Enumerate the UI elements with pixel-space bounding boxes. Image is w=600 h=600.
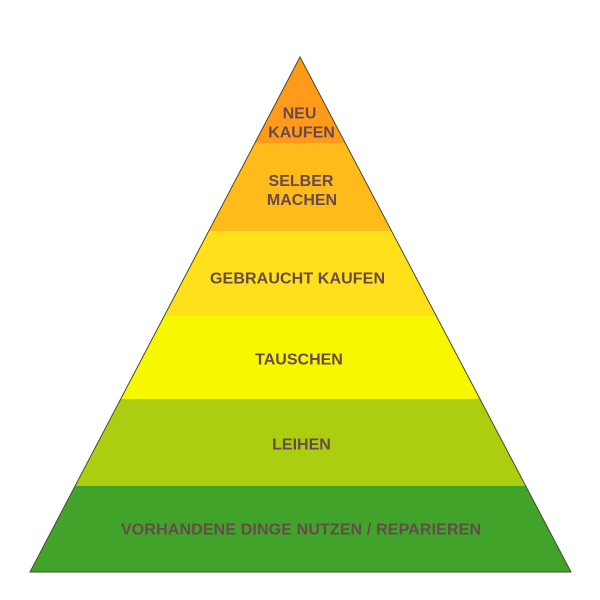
level: selber machen: SELBER [269,173,334,190]
level: selber machen [209,143,392,231]
level: vorhandene dinge nutzen / reparieren [30,486,571,572]
level: leihen [75,399,526,486]
level: neu kaufen: NEU [283,106,316,122]
level: tauschen: TAUSCHEN [255,352,343,368]
level: neu kaufen: KAUFEN [268,124,335,142]
level: selber machen: MACHEN [267,192,337,209]
level: tauschen [121,316,480,399]
level: gebraucht kaufen [164,231,436,316]
level: vorhandene dinge nutzen / reparieren: VORHANDENE DINGE NUTZEN / REPARIEREN [121,522,481,538]
level: gebraucht kaufen: GEBRAUCHT KAUFEN [210,270,385,288]
pyramid outline [30,57,571,572]
level: neu kaufen [255,57,345,143]
pyramid [30,57,571,572]
level: leihen: LEIHEN [272,436,331,454]
